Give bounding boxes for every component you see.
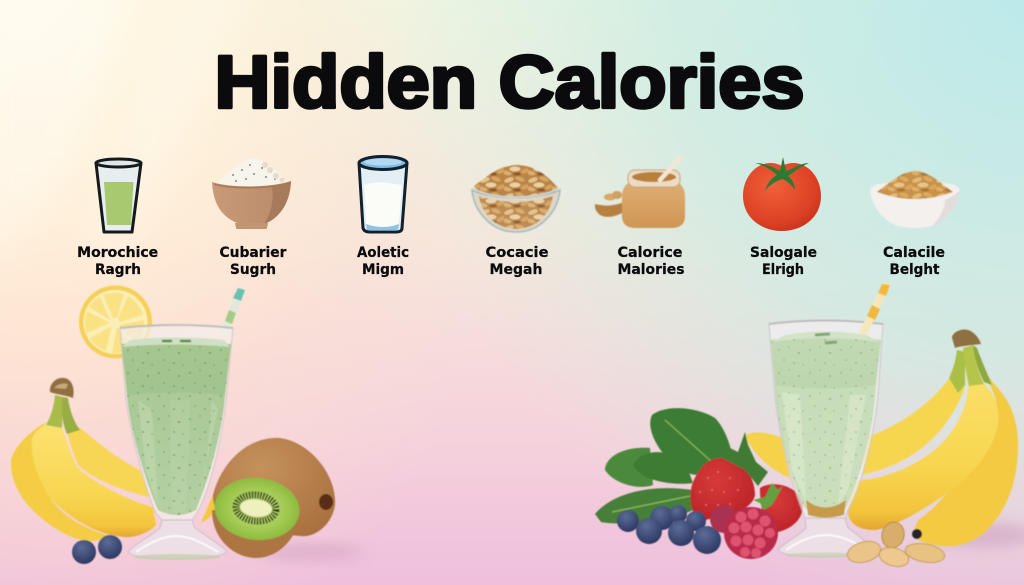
ground shadow (255, 545, 365, 559)
icon: blueberries (72, 535, 122, 564)
label: Salogale Elrigh: Elrigh (762, 262, 804, 278)
icon: tomato (743, 157, 821, 231)
icon: lemon slice (79, 286, 152, 358)
icon: smoothie glass (769, 320, 883, 518)
label: Morochice Ragrh: Morochice (77, 245, 158, 261)
left smoothie group (11, 286, 365, 564)
ingredient row (77, 156, 960, 278)
icon: blueberries (617, 505, 721, 554)
icon: spinach leaves (595, 408, 733, 524)
icon: front banana (32, 422, 156, 537)
icon: peanuts (845, 520, 946, 570)
icon: glass of milk (359, 156, 407, 232)
icon: banana stems (46, 378, 80, 434)
icon: smoothie glass (120, 325, 233, 520)
icon: yellow striped straw (859, 282, 891, 335)
label: Calacile Belght: Calacile (883, 245, 945, 261)
label: Aoletic Migm: Migm (362, 262, 404, 278)
icon: glass foot (778, 518, 873, 558)
label: Cocacie Megah: Megah (490, 262, 542, 278)
icon: banana tip behind glass (200, 492, 218, 525)
label: Morochice Ragrh: Ragrh (95, 262, 141, 278)
icon: glass foot (128, 520, 227, 560)
label: Calacile Belght: Belght (890, 262, 940, 278)
ground shadow (935, 523, 1024, 547)
icon: white bowl of granola (870, 171, 960, 228)
icon: outer banana (11, 422, 112, 541)
label: Calorice Malories: Malories (618, 262, 684, 278)
icon: whole kiwi (213, 438, 335, 536)
icon: green drink glass (96, 159, 141, 232)
icon: bowl of rice (212, 158, 291, 229)
icon: kiwi half (212, 474, 302, 558)
icon: peanut butter jar (595, 157, 685, 228)
icon: back banana (66, 425, 150, 497)
label: Cocacie Megah (486, 245, 548, 278)
label: Calacile Belght (883, 245, 945, 278)
label: Cocacie Megah: Cocacie (486, 245, 548, 261)
icon: strawberries (690, 432, 803, 532)
icon: striped straw (220, 288, 245, 335)
label: Cubarier Sugrh: Cubarier (220, 245, 287, 261)
label: Aoletic Migm (357, 245, 409, 278)
title: Hidden Calories (214, 40, 804, 124)
label: Cubarier Sugrh (220, 245, 287, 278)
label: Salogale Elrigh: Salogale (750, 245, 817, 261)
icon: raspberries (710, 505, 778, 559)
label: Cubarier Sugrh: Sugrh (230, 262, 276, 278)
label: Salogale Elrigh (750, 245, 817, 278)
label: Calorice Malories (618, 245, 684, 278)
icon: banana bunch (848, 329, 1018, 546)
icon: glass bowl of nuts (472, 165, 560, 232)
label: Morochice Ragrh (77, 245, 158, 278)
icon: banana behind glass (746, 432, 790, 478)
label: Calorice Malories: Calorice (618, 245, 682, 261)
label: Aoletic Migm: Aoletic (357, 245, 409, 261)
right smoothie group (595, 282, 1024, 570)
